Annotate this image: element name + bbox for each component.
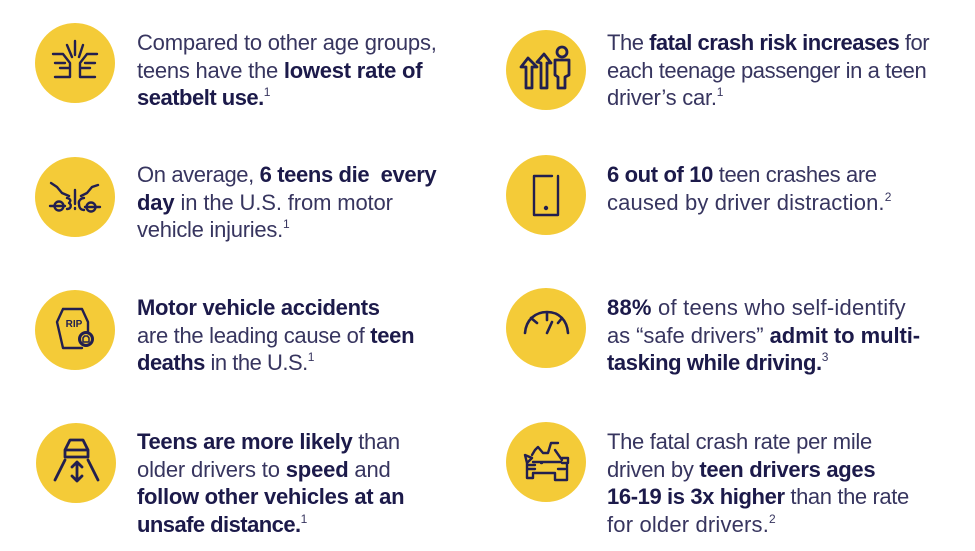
text: leading cause: deaths in the U.S.1 bbox=[137, 350, 314, 375]
text: speed and distance bbox=[137, 429, 404, 536]
icon: passengers rising bbox=[506, 30, 586, 110]
text: speed and distance: unsafe distance.1 bbox=[137, 512, 307, 536]
text: seatbelt use: seatbelt use.1 bbox=[137, 85, 270, 110]
text: fatal crash rate: for older drivers.2 bbox=[607, 512, 776, 536]
text: driver distraction bbox=[607, 162, 891, 214]
text: daily deaths bbox=[137, 162, 436, 242]
text: multi-tasking: tasking while driving.3 bbox=[607, 350, 828, 375]
icon: RIP headstone: RIP bbox=[66, 319, 83, 330]
text: leading cause: are the leading cause of teen bbox=[137, 322, 414, 348]
icon: following distance bbox=[36, 423, 116, 503]
text: passenger risk: each teenage passenger in a teen bbox=[607, 58, 926, 82]
text: speed and distance: follow other vehicles at an bbox=[137, 484, 404, 509]
text: seatbelt use: teens have the lowest rate of bbox=[137, 58, 422, 82]
text: seatbelt use bbox=[137, 30, 437, 110]
text: passenger risk: The fatal crash risk increases for bbox=[607, 30, 929, 55]
icon: phone bbox=[506, 155, 586, 235]
text: seatbelt use: Compared to other age groups, bbox=[137, 30, 437, 55]
text: speed and distance: older drivers to speed and bbox=[137, 456, 391, 482]
text: daily deaths: vehicle injuries.1 bbox=[137, 217, 290, 242]
text: fatal crash rate bbox=[607, 429, 909, 536]
text: multi-tasking bbox=[607, 295, 920, 375]
text: driver distraction: 6 out of 10 teen crashes are bbox=[607, 162, 877, 187]
text: multi-tasking: as “safe drivers” admit to multi- bbox=[607, 322, 920, 348]
text: leading cause: Motor vehicle accidents bbox=[137, 295, 380, 320]
text: daily deaths: On average, 6 teens die every bbox=[137, 162, 436, 187]
text: speed and distance: Teens are more likely than bbox=[137, 429, 400, 454]
text: passenger risk: driver’s car.1 bbox=[607, 85, 723, 110]
text: driver distraction: caused by driver distraction.2 bbox=[607, 190, 891, 214]
text: daily deaths: day in the U.S. from motor bbox=[137, 190, 393, 214]
text: fatal crash rate: driven by teen drivers ages bbox=[607, 456, 875, 482]
icon: collision bbox=[35, 157, 115, 237]
text: passenger risk bbox=[607, 30, 930, 110]
text: multi-tasking: 88% of teens who self-identify bbox=[607, 295, 906, 320]
text: fatal crash rate: The fatal crash rate per mile bbox=[607, 429, 872, 454]
icon: speedometer bbox=[506, 288, 586, 368]
icon: crashed cars bbox=[506, 422, 586, 502]
text: fatal crash rate: 16-19 is 3x higher than the rate bbox=[607, 484, 909, 509]
icon: crash impact bbox=[35, 23, 115, 103]
icon: RIP headstone bbox=[35, 290, 115, 370]
text: leading cause bbox=[137, 295, 414, 375]
